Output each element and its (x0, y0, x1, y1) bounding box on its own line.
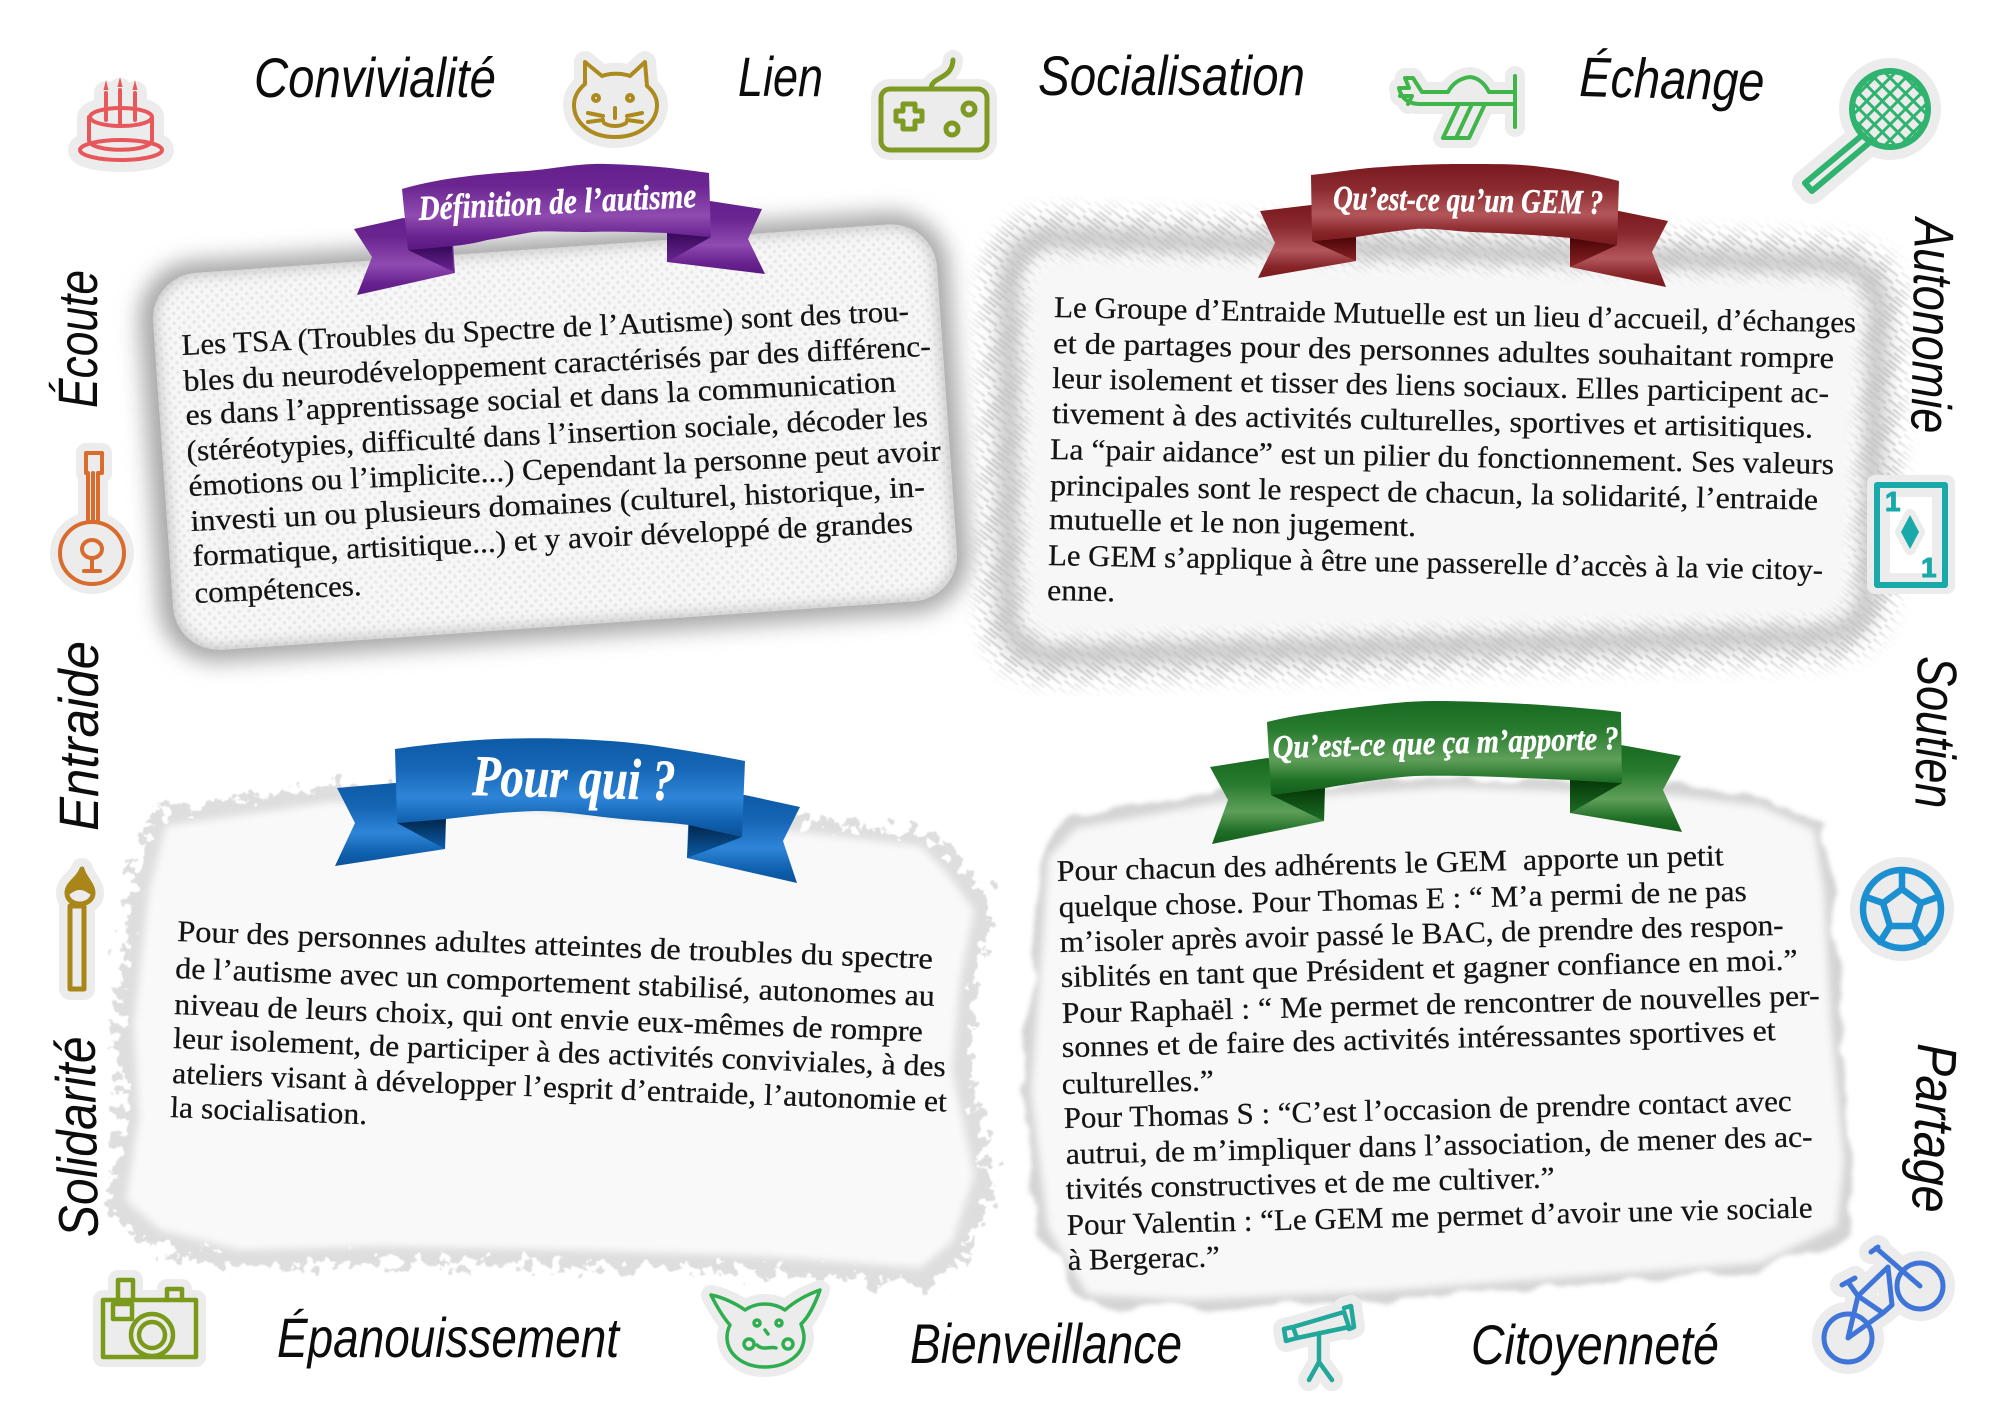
body text (1047, 291, 1856, 608)
panel frame: hatched blurred card (1008, 238, 1878, 655)
word: Partage: Partage (1900, 1043, 1969, 1214)
panel: pour qui (108, 738, 994, 1286)
icon: playing card (1867, 475, 1955, 594)
word: Écoute: Écoute (46, 270, 109, 408)
word: Autonomie: Autonomie (1899, 215, 1966, 434)
body text: tivités constructives et de me cultiver.” (1065, 1161, 1555, 1206)
body text: Pour chacun des adhérents le GEM apporte un petit (1056, 839, 1725, 888)
word: Entraide: Entraide (47, 641, 110, 831)
panel: définition de l'autisme (135, 164, 973, 666)
body text: Le Groupe d’Entraide Mutuelle est un lieu d’accueil, d’échanges (1054, 291, 1856, 339)
icon: playing card: 1 (1885, 486, 1901, 517)
body text: Pour Thomas S : “C’est l’occasion de prendre contact avec (1063, 1085, 1792, 1135)
ribbon title: Définition de l’autisme (417, 176, 697, 228)
body text: Les TSA (Troubles du Spectre de l’Autisme) sont des trou- (181, 295, 910, 362)
panel: qu'est-ce qu'un GEM (1008, 164, 1878, 655)
icon: banjo (60, 453, 124, 584)
word: Lien: Lien (738, 45, 823, 108)
body text: La “pair aidance” est un pilier du fonctionnement. Ses valeurs (1050, 433, 1834, 481)
body text: la socialisation. (170, 1091, 368, 1131)
word: Bienveillance: Bienveillance (910, 1312, 1182, 1375)
body text: formatique, artisitique...) et y avoir développé de grandes (192, 506, 914, 573)
body text: (stéréotypies, difficulté dans l’insertion sociale, décoder les (186, 400, 929, 468)
icon: paintbrush (67, 869, 93, 989)
body text (1056, 839, 1820, 1277)
word: Convivialité: Convivialité (254, 46, 496, 109)
icon: cat (574, 62, 657, 137)
body text: tivement à des activités culturelles, sportives et artisitiques. (1052, 397, 1813, 445)
panel: qu'est-ce que ça m'apporte (1022, 701, 1853, 1309)
body text: leur isolement et tisser des liens sociaux. Elles participent ac- (1052, 362, 1829, 410)
panel frame: dotted blurred card (135, 208, 973, 666)
word: Épanouissement: Épanouissement (277, 1306, 621, 1369)
body text: m’isoler après avoir passé le BAC, de prendre des respon- (1059, 909, 1784, 959)
body text: niveau de leurs choix, qui ont envie eux-mêmes de rompre (174, 988, 923, 1048)
ribbon title: Pour qui ? (471, 743, 676, 813)
body text: leur isolement, de participer à des activités conviviales, à des (173, 1022, 946, 1083)
word: Socialisation: Socialisation (1038, 44, 1305, 107)
icon: cake (80, 77, 162, 160)
body text: autrui, de m’impliquer dans l’association, de mener des ac- (1065, 1120, 1813, 1171)
icon: playing card: 1 (1921, 552, 1937, 583)
body text: sonnes et de faire des activités intéressantes sportives et (1061, 1014, 1777, 1064)
word: Soutien: Soutien (1903, 656, 1969, 809)
icon: racket (1805, 71, 1928, 191)
icon: game controller (881, 60, 987, 150)
body text: bles du neurodéveloppement caractérisés par des différenc- (183, 330, 931, 398)
body text: enne. (1047, 574, 1115, 608)
body text: émotions ou l’implicite...) Cependant la personne peut avoir (188, 435, 941, 503)
panel frame: soft torn card (1022, 777, 1853, 1309)
word: Échange: Échange (1579, 45, 1765, 113)
panel frame: spiky torn card (108, 786, 994, 1286)
body text: ateliers visant à développer l’esprit d’entraide, l’autonomie et (172, 1057, 948, 1118)
body text: mutuelle et le non jugement. (1049, 503, 1416, 543)
body text: Pour Valentin : “Le GEM me permet d’avoir une vie sociale (1066, 1191, 1813, 1242)
word: Solidarité: Solidarité (43, 1036, 110, 1238)
body text: siblités en tant que Président et gagner confiance en moi.” (1060, 944, 1798, 994)
body text: de l’autisme avec un comportement stabilisé, autonomes au (175, 952, 935, 1013)
body text: principales sont le respect de chacun, la solidarité, l’entraide (1050, 469, 1818, 517)
body text: culturelles.” (1061, 1064, 1214, 1101)
body text: es dans l’apprentissage social et dans la communication (185, 366, 897, 432)
body text: Pour des personnes adultes atteintes de troubles du spectre (177, 915, 933, 976)
ribbon: GEM (1258, 164, 1668, 287)
ribbon title: Qu’est-ce que ça m’apporte ? (1272, 721, 1619, 766)
body text: compétences. (194, 569, 362, 610)
body text: Pour Raphaël : “ Me permet de rencontrer de nouvelles per- (1061, 979, 1820, 1030)
icon: soccer ball (1863, 870, 1941, 948)
body text (181, 295, 941, 610)
ribbon: pour qui (335, 738, 800, 883)
ribbon title: Qu’est-ce qu’un GEM ? (1333, 180, 1603, 222)
body text: quelque chose. Pour Thomas E : “ M’a permi de ne pas (1058, 875, 1747, 924)
icon: plane (1399, 76, 1515, 138)
body text (170, 915, 948, 1131)
body text: et de partages pour des personnes adultes souhaitant rompre (1053, 327, 1834, 375)
body text: Le GEM s’applique à être une passerelle d’accès à la vie citoy- (1048, 539, 1823, 587)
icon: creature face (711, 1290, 820, 1367)
ribbon: définition (354, 164, 765, 295)
icon: telescope (1284, 1306, 1354, 1380)
word: Citoyenneté: Citoyenneté (1471, 1313, 1719, 1376)
icon: bicycle (1824, 1247, 1943, 1362)
ribbon: apport (1210, 701, 1682, 844)
icon: camera (103, 1280, 196, 1357)
body text: investi un ou plusieurs domaines (culturel, historique, in- (190, 470, 926, 538)
body text: à Bergerac.” (1067, 1240, 1220, 1277)
